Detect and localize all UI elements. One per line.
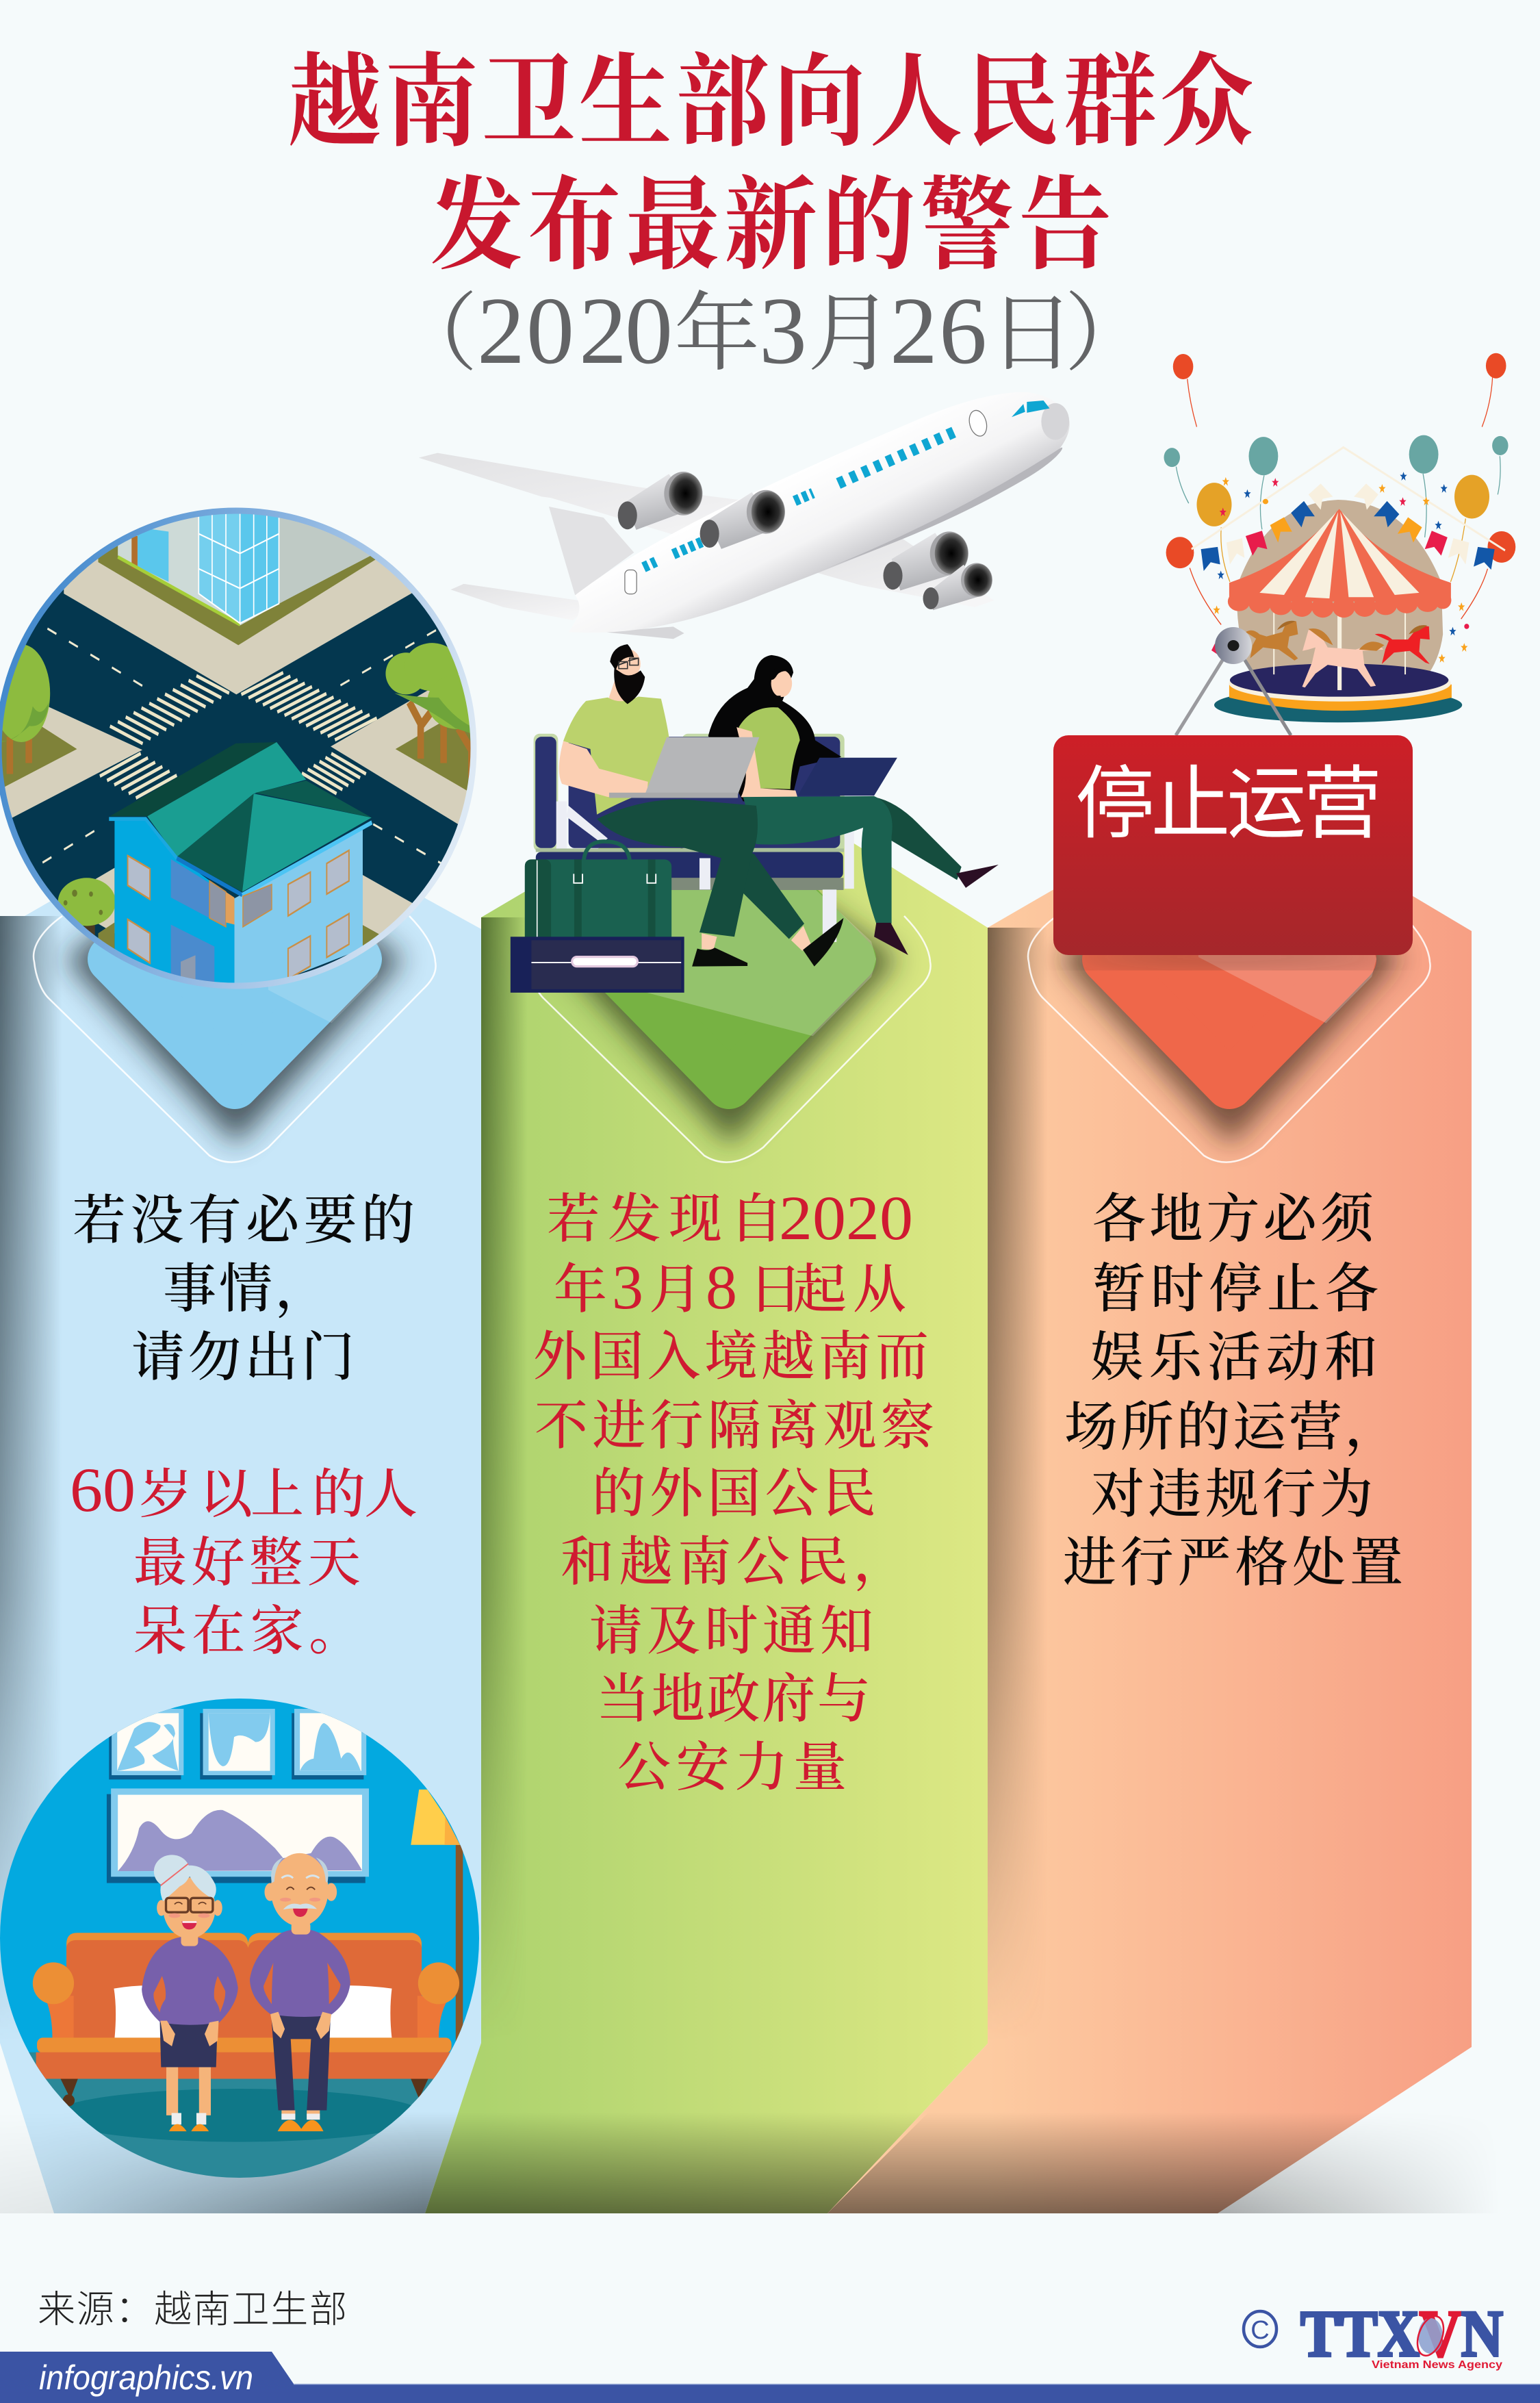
carousel body <box>1237 500 1443 678</box>
text: report people not quarantined: 若发现自 <box>547 1189 783 1249</box>
airplane windows <box>625 400 1049 594</box>
text: over 60 advice: 呆在家。 <box>133 1601 362 1661</box>
date subtitle: 0 <box>625 278 673 384</box>
date subtitle: 6 <box>939 278 987 384</box>
text: over 60 advice: 以 <box>199 1464 255 1524</box>
text: suspend entertainment venues: 娱乐活动和 <box>1090 1327 1378 1387</box>
text: report people not quarantined: 当地政府与 <box>596 1669 871 1729</box>
date subtitle: （ <box>392 288 478 382</box>
text: suspend entertainment venues: 各地方必须 <box>1092 1189 1375 1249</box>
text: report people not quarantined: 请及时通知 <box>589 1601 873 1661</box>
suitcase and bag <box>511 841 684 993</box>
date subtitle: 日 <box>989 288 1075 382</box>
text: report people not quarantined: 和越南公民， <box>561 1532 907 1592</box>
canopy <box>1228 509 1451 618</box>
bunting flags <box>1192 447 1505 571</box>
text: stay home advice: 事情， <box>163 1259 329 1319</box>
text: stay home advice: 若没有必要的 <box>73 1191 415 1250</box>
text: report people not quarantined: 外国入境越南而 <box>533 1327 929 1386</box>
red sign: stop operations: 停止运营 <box>1075 759 1382 848</box>
house <box>109 742 372 999</box>
text: suspend entertainment venues: 对违规行为 <box>1091 1464 1373 1524</box>
date subtitle: 月 <box>808 288 893 382</box>
website label: infographics.vn <box>39 2358 253 2397</box>
text: over 60 advice: 的 <box>312 1464 365 1524</box>
text: over 60 advice: 人 <box>364 1464 418 1524</box>
copyright mark <box>1244 2311 1276 2347</box>
circle ring <box>0 511 474 986</box>
date subtitle: 0 <box>526 278 574 384</box>
date subtitle: 3 <box>759 278 807 384</box>
text: over 60 advice: 上 <box>251 1464 304 1524</box>
bottom background shadow <box>0 2131 1470 2213</box>
illustration: airplane <box>419 392 1070 639</box>
right trees <box>385 643 471 778</box>
text: report people not quarantined: 从 <box>853 1260 906 1319</box>
red sign: stop operations <box>1053 735 1413 965</box>
bench <box>534 734 854 942</box>
text: over 60 advice: 最好整天 <box>133 1533 361 1592</box>
panel: blue column <box>0 794 481 2213</box>
balloons <box>1164 353 1515 568</box>
confetti stars <box>1213 472 1469 663</box>
green arrow diamond <box>538 848 932 1163</box>
text: report people not quarantined <box>533 1183 934 1797</box>
text: report people not quarantined: 3 <box>612 1252 643 1322</box>
title: 发布最新的警告 <box>430 170 1112 282</box>
date subtitle: 年 <box>674 288 760 382</box>
text: suspend entertainment venues: 暂时停止各 <box>1092 1259 1378 1319</box>
text: report people not quarantined: 起 <box>793 1260 847 1319</box>
date subtitle: 2 <box>890 278 938 384</box>
horses <box>1246 621 1430 687</box>
text: stay home advice: 请勿出门 <box>131 1327 355 1387</box>
small tree <box>58 878 116 936</box>
text: report people not quarantined: 月 <box>649 1260 702 1319</box>
title: 越南卫生部向人民群众 <box>288 47 1253 159</box>
woman <box>708 655 999 955</box>
grandmother <box>142 1855 238 2131</box>
wall paintings <box>107 1709 369 1883</box>
source credit: 来源：越南卫生部 <box>38 2288 347 2330</box>
sign stand <box>1176 627 1291 735</box>
text: report people not quarantined: 不进行隔离观察 <box>535 1396 934 1455</box>
sofa <box>33 1933 459 2107</box>
panel: green column <box>425 768 988 2213</box>
panel: peach column <box>827 787 1472 2213</box>
illustration: elderly couple on sofa <box>0 1690 485 2191</box>
airplane engines <box>618 472 992 610</box>
text: report people not quarantined: 2020 <box>779 1183 913 1253</box>
date subtitle: 2 <box>579 278 627 384</box>
floor lamp <box>411 1790 463 2050</box>
title <box>288 47 1253 282</box>
text: over 60 advice: 岁 <box>139 1464 192 1524</box>
text: report people not quarantined: 年 <box>554 1260 607 1319</box>
date subtitle: 2 <box>477 278 525 384</box>
footer bar <box>0 2352 1540 2403</box>
text: suspend entertainment venues <box>1063 1189 1403 1592</box>
text: over 60 advice: 60 <box>70 1455 136 1525</box>
blue arrow diamond <box>33 915 437 1163</box>
grandfather <box>250 1853 350 2131</box>
text: over 60 advice <box>70 1455 418 1661</box>
left tree <box>0 644 50 774</box>
orange arrow diamond <box>1027 917 1431 1163</box>
man <box>559 644 843 967</box>
text: report people not quarantined: 的外国公民 <box>592 1464 876 1523</box>
text: report people not quarantined: 日 <box>749 1260 802 1319</box>
illustration: carousel with balloons <box>1164 353 1515 722</box>
text: report people not quarantined: 8 <box>706 1252 737 1322</box>
date subtitle: ） <box>1064 288 1150 382</box>
illustration: city intersection with house <box>0 497 491 1003</box>
illustration: travellers on bench with luggage <box>511 644 999 993</box>
copyright mark: C <box>1250 2316 1270 2345</box>
text: suspend entertainment venues: 进行严格处置 <box>1063 1533 1403 1592</box>
text: suspend entertainment venues: 场所的运营， <box>1064 1397 1398 1457</box>
text: report people not quarantined: 公安力量 <box>617 1738 847 1797</box>
logo: TTXVN: Vietnam News Agency <box>1372 2359 1502 2371</box>
text: stay home advice <box>73 1191 415 1387</box>
logo: TTXVN: TTXVN <box>1300 2297 1503 2370</box>
balloon strings <box>1176 377 1500 624</box>
